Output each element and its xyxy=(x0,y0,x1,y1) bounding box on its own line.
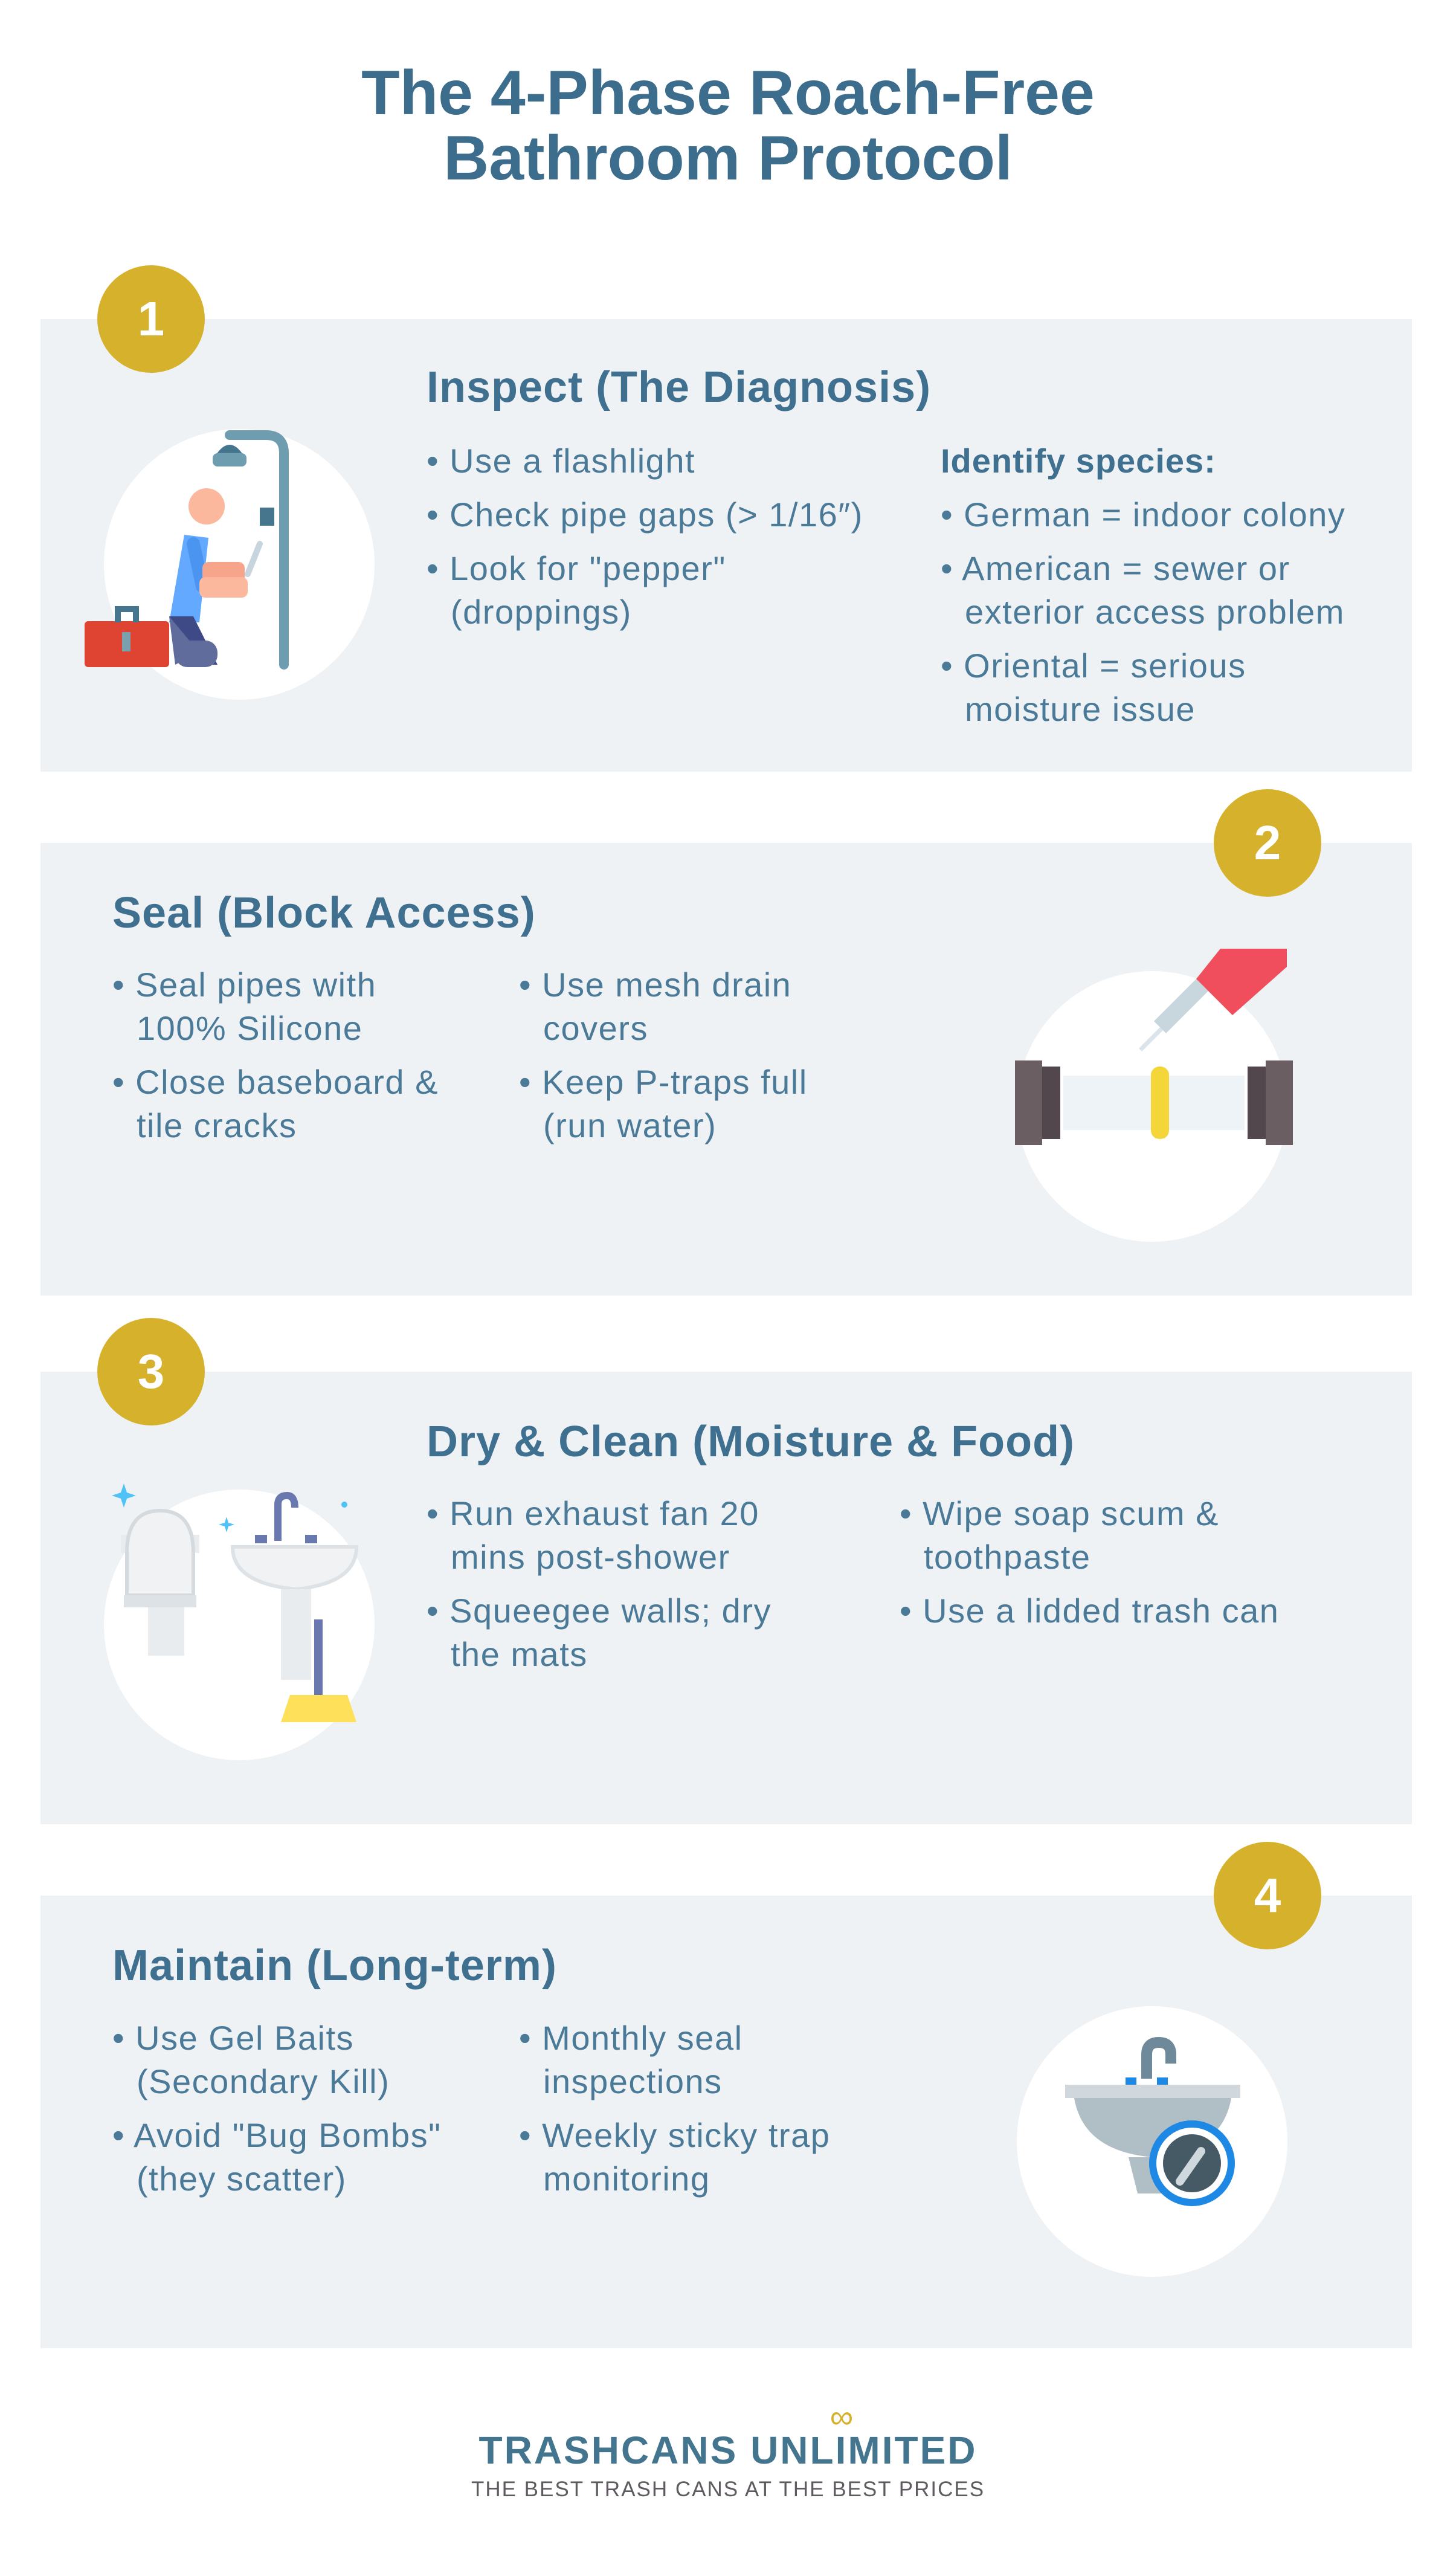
bullets: seal col2: • Keep P-traps full (run water) xyxy=(519,1063,808,1144)
heading: maintain: Maintain (Long-term) xyxy=(112,1942,557,1990)
bullets: maintain col1: • Avoid "Bug Bombs" (they scatter) xyxy=(112,2116,441,2198)
badge 1: 1 xyxy=(138,292,164,346)
badge 2 xyxy=(1214,789,1321,897)
bullets: dry col2: • Wipe soap scum & toothpaste xyxy=(900,1494,1219,1576)
bullets: seal col1 xyxy=(112,966,439,1144)
bullets: maintain col1: • Use Gel Baits (Secondary Kill) xyxy=(112,2019,390,2100)
bullets: inspect left: • Look for "pepper" (droppings) xyxy=(427,549,726,631)
bullets: inspect left: • Use a flashlight xyxy=(427,442,695,480)
bullets: dry col1: • Squeegee walls; dry the mats xyxy=(427,1592,771,1673)
heading: dry & clean: Dry & Clean (Moisture & Food) xyxy=(427,1418,1075,1466)
icon: plumber xyxy=(85,429,375,700)
badge 4 xyxy=(1214,1842,1321,1949)
bullets: seal col2 xyxy=(519,966,808,1144)
bullets: inspect left xyxy=(427,442,863,631)
bullets: maintain col1 xyxy=(112,2019,441,2198)
footer logo: TRASHCANS UNLIMITED xyxy=(479,2429,977,2472)
bullets: species: • Oriental = serious moisture issue xyxy=(941,647,1246,728)
panel: seal xyxy=(40,843,1412,1296)
heading: inspect: Inspect (The Diagnosis) xyxy=(427,363,931,412)
bullets: maintain col2: • Weekly sticky trap monitoring xyxy=(519,2116,830,2198)
panel: dry & clean xyxy=(40,1372,1412,1824)
panel: inspect xyxy=(40,319,1412,772)
bullets: dry col1 xyxy=(427,1494,771,1673)
badge 2: 2 xyxy=(1254,816,1281,870)
icon: sink with wrench xyxy=(1017,2006,1287,2277)
badge 4: 4 xyxy=(1254,1868,1281,1922)
panel: maintain xyxy=(40,1896,1412,2348)
footer logo xyxy=(471,2399,985,2501)
bullets: seal col2: • Use mesh drain covers xyxy=(519,966,791,1047)
heading: seal: Seal (Block Access) xyxy=(112,889,536,937)
title: Bathroom Protocol xyxy=(443,123,1013,193)
bullets: inspect left: • Check pipe gaps (> 1/16″) xyxy=(427,495,863,534)
bullets: species xyxy=(941,442,1345,728)
bullets: species: Identify species: xyxy=(941,442,1216,480)
bullets: seal col1: • Close baseboard & tile cracks xyxy=(112,1063,439,1144)
bullets: maintain col2: • Monthly seal inspections xyxy=(519,2019,743,2100)
icon: bathroom cleaning xyxy=(104,1483,375,1760)
icon: infinity: ∞ xyxy=(830,2399,853,2435)
icon: pipe sealing xyxy=(1015,949,1293,1242)
bullets: species: • American = sewer or exterior access problem xyxy=(941,549,1345,631)
title xyxy=(361,58,1095,193)
bullets: dry col1: • Run exhaust fan 20 mins post-shower xyxy=(427,1494,759,1576)
bullets: maintain col2 xyxy=(519,2019,830,2198)
bullets: dry col2 xyxy=(900,1494,1279,1630)
badge 3: 3 xyxy=(138,1344,164,1398)
badge 3 xyxy=(97,1318,205,1425)
badge 1 xyxy=(97,265,205,373)
bullets: dry col2: • Use a lidded trash can xyxy=(900,1592,1279,1630)
bullets: seal col1: • Seal pipes with 100% Silicone xyxy=(112,966,376,1047)
footer logo: THE BEST TRASH CANS AT THE BEST PRICES xyxy=(471,2477,985,2501)
title: The 4-Phase Roach-Free xyxy=(361,58,1095,128)
bullets: species: • German = indoor colony xyxy=(941,495,1345,534)
